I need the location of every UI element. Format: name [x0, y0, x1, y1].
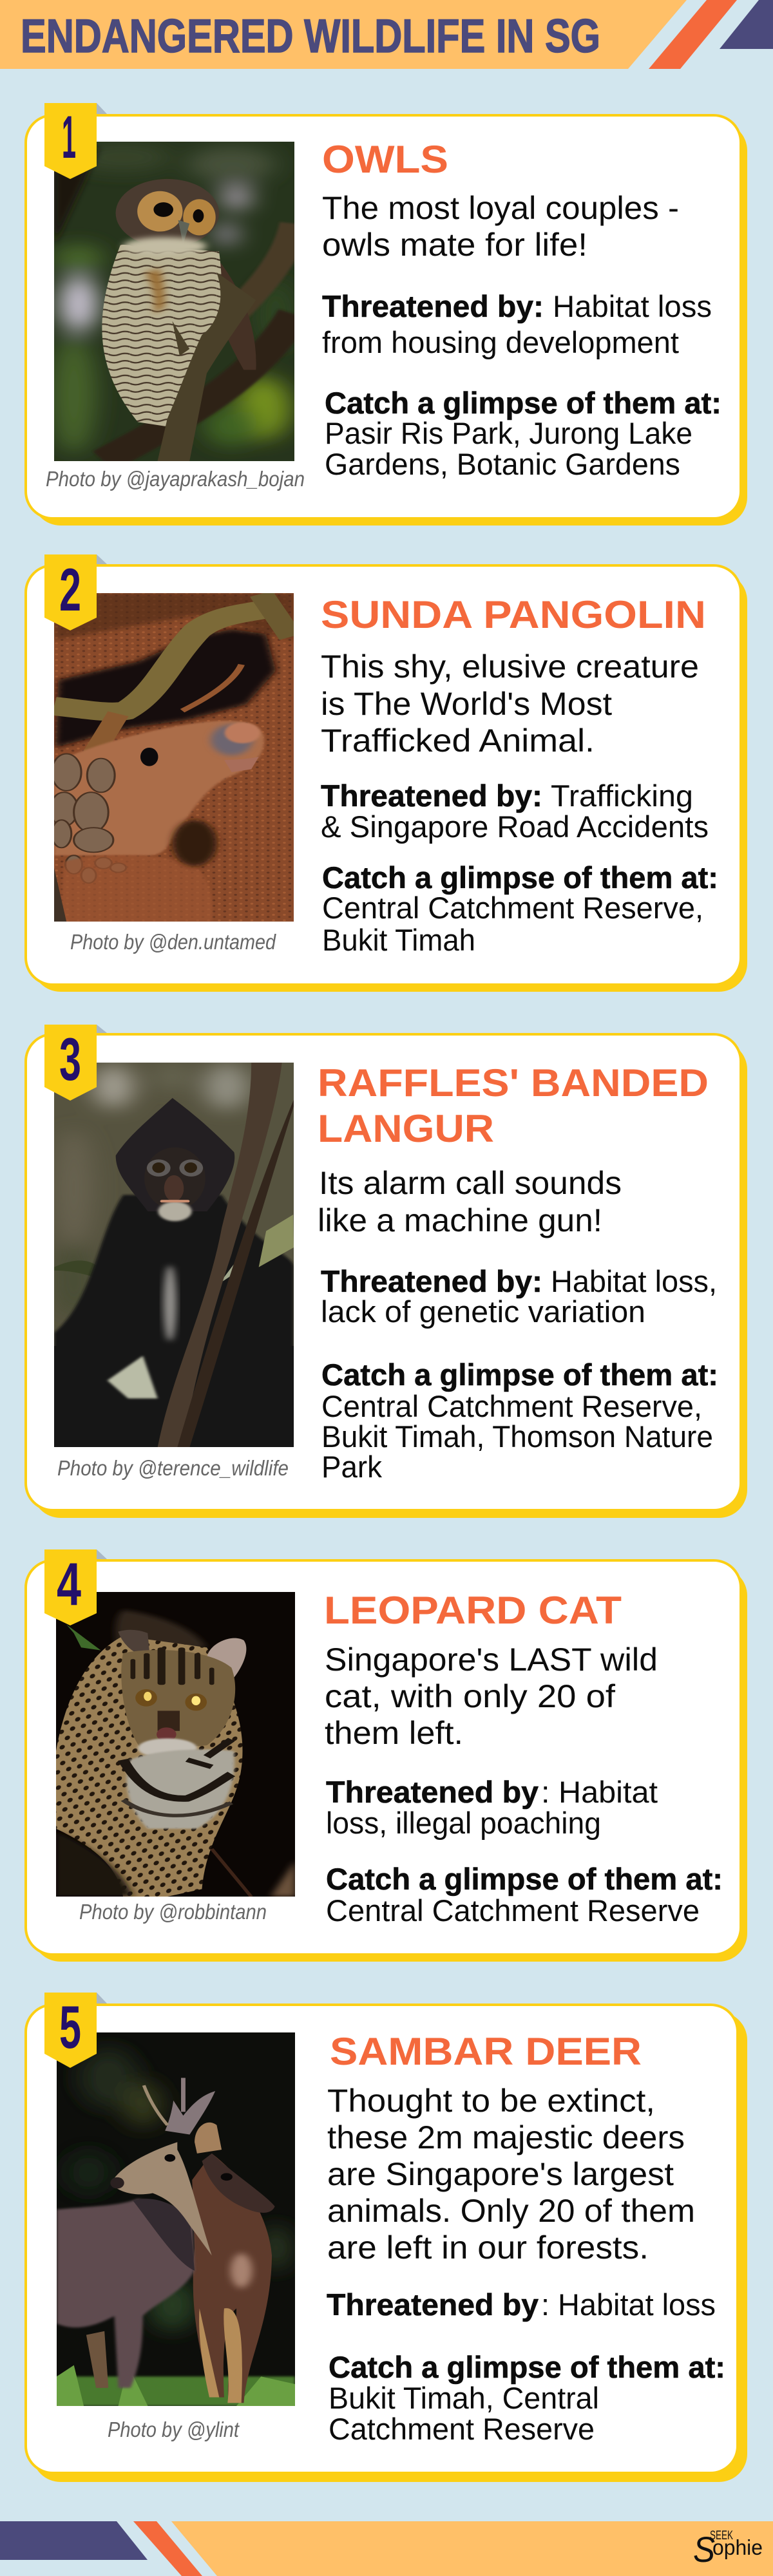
number ribbon: [44, 1025, 107, 1101]
description: [327, 2083, 695, 2266]
footer banner: [0, 2521, 773, 2576]
locations: Catch a glimpse of them at:: [321, 1358, 718, 1392]
threats: Threatened by: [326, 1775, 539, 1809]
description: is The World's Most: [321, 686, 612, 722]
photo credit: Photo by @ylint: [108, 2418, 240, 2441]
animal name: SAMBAR DEER: [330, 2030, 642, 2073]
panel: sunda pangolin: [26, 554, 747, 992]
animal name: [318, 1061, 709, 1150]
card background: [26, 565, 747, 992]
locations: Catch a glimpse of them at:: [326, 1862, 723, 1896]
threats: lack of genetic variation: [321, 1294, 645, 1329]
description: them left.: [325, 1715, 463, 1751]
photo: sambar deer: [57, 2032, 295, 2406]
locations: Catch a glimpse of them at:: [325, 386, 721, 420]
threats: loss, illegal poaching: [326, 1806, 601, 1840]
locations: [329, 2350, 725, 2446]
description: owls mate for life!: [322, 227, 587, 263]
locations: Central Catchment Reserve: [326, 1893, 700, 1927]
locations: [326, 1862, 723, 1927]
description: Its alarm call sounds: [319, 1165, 622, 1201]
title: ENDANGERED WILDLIFE IN SG: [21, 10, 600, 62]
photo: pangolin: [54, 593, 294, 922]
threats: [326, 1775, 658, 1840]
locations: Park: [321, 1450, 382, 1484]
number ribbon: 5: [59, 1993, 81, 2061]
locations: Central Catchment Reserve,: [321, 1389, 702, 1423]
threats: [321, 1264, 717, 1329]
photo: leopard cat: [56, 1592, 295, 1897]
photo: langur: [54, 1063, 294, 1447]
description: Trafficked Animal.: [321, 723, 595, 759]
threats: Habitat loss,: [551, 1264, 717, 1298]
number ribbon: 1: [62, 103, 76, 171]
animal name: LEOPARD CAT: [324, 1589, 622, 1632]
threats: [322, 289, 712, 359]
panel: sambar deer: [26, 1993, 747, 2482]
locations: [322, 860, 718, 957]
number ribbon: 4: [57, 1550, 81, 1618]
number ribbon: 2: [59, 556, 81, 623]
description: [321, 649, 699, 759]
number ribbon: 3: [59, 1025, 81, 1093]
threats: [327, 2287, 716, 2322]
photo credit: Photo by @jayaprakash_bojan: [46, 467, 305, 491]
description: are Singapore's largest: [327, 2156, 674, 2192]
locations: Catchment Reserve: [329, 2412, 595, 2446]
logo: seek sophie: S: [693, 2529, 715, 2570]
card background: [26, 115, 747, 526]
panel: owls: [26, 103, 747, 526]
logo: seek sophie: SEEK: [710, 2529, 733, 2543]
card background: [26, 1560, 747, 1962]
photo credit: Photo by @robbintann: [79, 1900, 267, 1924]
threats: Threatened by:: [322, 289, 544, 323]
locations: [325, 386, 721, 481]
card background: [26, 1034, 747, 1518]
threats: : Habitat loss: [541, 2287, 716, 2322]
description: [325, 1642, 658, 1751]
locations: Bukit Timah: [322, 923, 475, 957]
photo credit: Photo by @terence_wildlife: [57, 1456, 289, 1480]
locations: [321, 1358, 718, 1484]
card background: [26, 2005, 747, 2482]
logo: seek sophie: [693, 2529, 763, 2570]
description: cat, with only 20 of: [325, 1678, 615, 1714]
description: [322, 190, 679, 263]
threats: Trafficking: [551, 779, 693, 813]
threats: Threatened by:: [321, 779, 542, 813]
threats: Threatened by: [327, 2287, 539, 2322]
number ribbon: [44, 1549, 107, 1625]
description: these 2m majestic deers: [327, 2119, 685, 2155]
threats: from housing development: [322, 325, 679, 359]
description: like a machine gun!: [318, 1202, 602, 1238]
description: Singapore's LAST wild: [325, 1642, 658, 1678]
locations: Bukit Timah, Central: [329, 2381, 599, 2415]
animal name: SUNDA PANGOLIN: [321, 593, 706, 636]
locations: Catch a glimpse of them at:: [329, 2350, 725, 2384]
locations: Catch a glimpse of them at:: [322, 860, 718, 895]
description: The most loyal couples -: [322, 190, 679, 226]
number ribbon: [44, 1993, 107, 2068]
description: Thought to be extinct,: [327, 2083, 655, 2119]
number ribbon: [44, 103, 107, 179]
threats: & Singapore Road Accidents: [321, 810, 709, 844]
locations: Pasir Ris Park, Jurong Lake: [325, 416, 692, 450]
panel: leopard cat: [26, 1549, 747, 1962]
threats: Habitat loss: [553, 289, 712, 323]
animal name: OWLS: [322, 138, 448, 181]
threats: [321, 779, 709, 844]
description: are left in our forests.: [327, 2230, 649, 2266]
description: This shy, elusive creature: [321, 649, 699, 685]
locations: Bukit Timah, Thomson Nature: [321, 1419, 713, 1454]
panel: raffles' banded langur: [26, 1025, 747, 1518]
locations: Central Catchment Reserve,: [322, 891, 703, 925]
threats: Threatened by:: [321, 1264, 542, 1298]
header banner: [0, 0, 773, 69]
animal name: LANGUR: [318, 1107, 494, 1150]
photo: owl: [54, 142, 294, 461]
description: [318, 1165, 622, 1238]
animal name: RAFFLES' BANDED: [318, 1061, 709, 1104]
locations: Gardens, Botanic Gardens: [325, 447, 680, 481]
number ribbon: [44, 554, 107, 630]
description: animals. Only 20 of them: [327, 2193, 695, 2229]
logo: seek sophie: ophie: [712, 2535, 763, 2559]
photo credit: Photo by @den.untamed: [70, 930, 276, 954]
threats: : Habitat: [541, 1775, 658, 1809]
